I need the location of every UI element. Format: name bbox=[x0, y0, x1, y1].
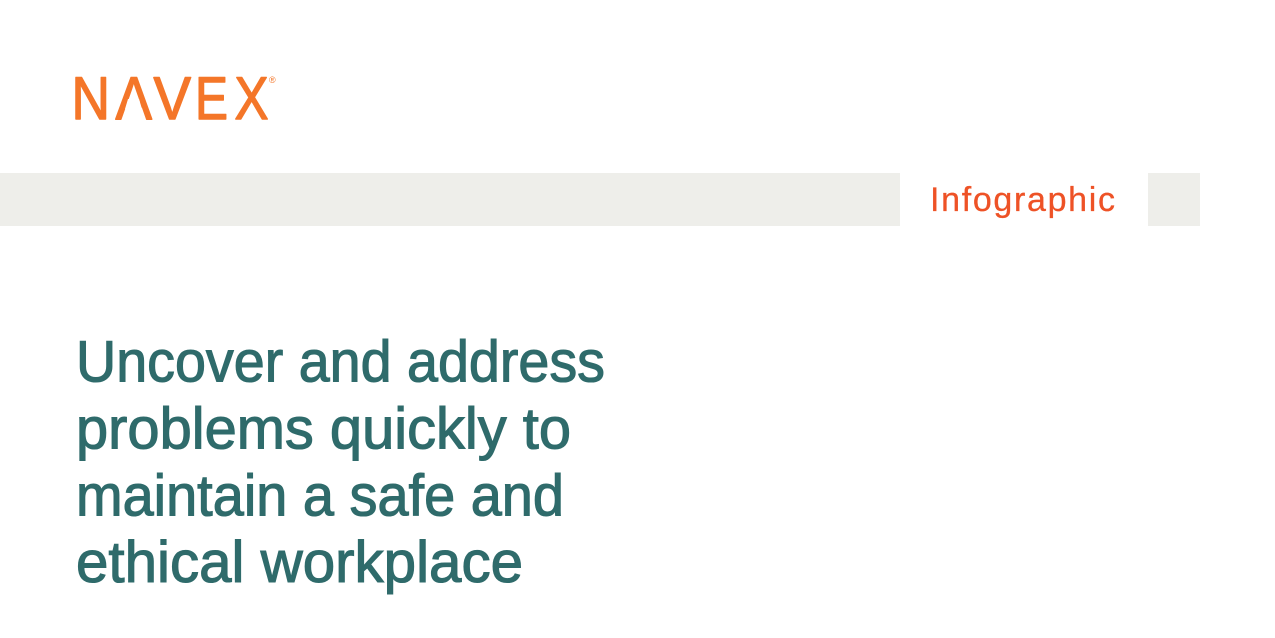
logo: NAVEX wordmark: N bbox=[72, 65, 110, 132]
logo: NAVEX wordmark: E bbox=[195, 65, 228, 132]
logo: NAVEX wordmark: X bbox=[234, 65, 268, 132]
heading bbox=[76, 330, 605, 595]
heading: maintain a safe and bbox=[76, 464, 564, 528]
logo: NAVEX wordmark: A bbox=[116, 65, 152, 132]
label: Infographic: Infographic bbox=[930, 181, 1115, 219]
heading: Uncover and address bbox=[76, 330, 605, 394]
logo: NAVEX wordmark bbox=[72, 65, 276, 132]
logo: NAVEX wordmark: V bbox=[154, 65, 191, 132]
heading: ethical workplace bbox=[76, 530, 523, 595]
header band left bbox=[0, 173, 900, 226]
heading: problems quickly to bbox=[76, 396, 571, 462]
header band right bbox=[1148, 173, 1200, 226]
logo: NAVEX wordmark: ® bbox=[269, 75, 276, 85]
